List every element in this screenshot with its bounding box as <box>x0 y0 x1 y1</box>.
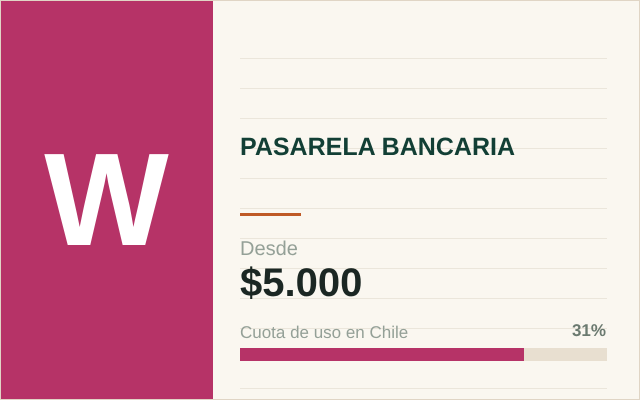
accent rule <box>240 213 301 216</box>
usage bar <box>240 348 607 361</box>
title: PASARELA BANCARIA <box>240 133 515 161</box>
usage label: Cuota de uso en Chile <box>240 323 408 342</box>
price: $5.000 <box>240 261 362 305</box>
panel: brand colour with initial <box>1 1 213 399</box>
usage percentage: 31% <box>572 321 606 340</box>
usage bar fill <box>240 348 524 361</box>
brand initial W: W <box>44 126 169 273</box>
label: Desde: Desde <box>240 238 298 260</box>
